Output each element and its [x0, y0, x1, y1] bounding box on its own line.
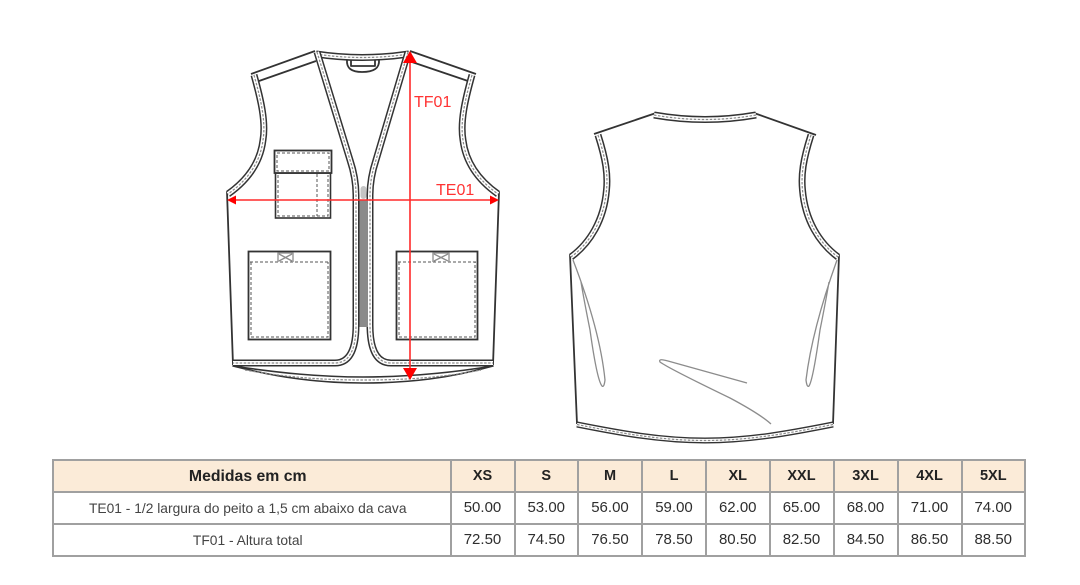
back centre crease [660, 360, 771, 424]
row TF01: 86.50 [911, 531, 948, 548]
row TF01: 72.50 [464, 531, 501, 548]
back right armhole binding [802, 135, 838, 257]
table header: 4XL [916, 468, 943, 484]
row TF01: 78.50 [655, 531, 693, 548]
row TF01 [193, 531, 1012, 548]
back vest shoulders and side seams [570, 113, 839, 424]
table header [54, 461, 1024, 548]
row TF01: 84.50 [847, 531, 884, 548]
left back fold [573, 260, 605, 386]
row TF01: 76.50 [591, 531, 629, 548]
table header: 5XL [980, 468, 1007, 484]
right armhole binding [462, 75, 498, 194]
chest pocket [274, 150, 332, 218]
right back fold [806, 260, 837, 386]
row TE01: 59.00 [655, 499, 693, 516]
measure TE01 horizontal arrow [227, 182, 499, 204]
label TF01: TF01 [414, 94, 451, 111]
back vest [570, 113, 839, 440]
left armhole binding [228, 75, 264, 194]
right shoulder seam [409, 61, 468, 81]
row TF01: 88.50 [974, 531, 1012, 548]
lower right pocket [396, 252, 478, 340]
row TE01: TE01 - 1/2 largura do peito a 1,5 cm abaixo da cava [89, 501, 407, 516]
neck hanger tab [347, 60, 379, 72]
row TF01: 80.50 [719, 531, 757, 548]
measure TF01 vertical arrow [403, 51, 451, 380]
row TE01: 50.00 [464, 499, 501, 516]
collar binding [316, 54, 409, 58]
row TE01 [89, 499, 1012, 516]
table header: Medidas em cm [189, 468, 307, 484]
vest technical drawings [226, 50, 840, 444]
row TE01: 62.00 [719, 499, 757, 516]
front vest shoulders and side seams [227, 51, 499, 365]
label TE01: TE01 [436, 182, 474, 199]
table header: S [541, 468, 551, 484]
back hem binding [577, 424, 833, 440]
row TF01: 82.50 [783, 531, 820, 548]
size table [52, 459, 1026, 557]
zipper [360, 186, 368, 327]
row TE01: 56.00 [591, 499, 629, 516]
row TE01: 71.00 [911, 499, 948, 516]
hem binding [233, 366, 493, 383]
table header: XS [473, 468, 492, 484]
left placket [233, 52, 356, 363]
right placket [370, 52, 493, 363]
back left armhole binding [571, 135, 607, 257]
row TE01: 68.00 [847, 499, 884, 516]
table header: XL [728, 468, 747, 484]
row TE01: 74.00 [974, 499, 1012, 516]
row TF01: 74.50 [527, 531, 565, 548]
front vest [227, 51, 499, 383]
table header: L [670, 468, 678, 484]
table header: M [604, 468, 616, 484]
table header: 3XL [852, 468, 879, 484]
back neck binding [654, 115, 756, 120]
row TF01: TF01 - Altura total [193, 533, 303, 548]
row TE01: 53.00 [527, 499, 565, 516]
row TE01: 65.00 [783, 499, 820, 516]
table header: XXL [787, 468, 816, 484]
lower left pocket [248, 252, 330, 340]
left shoulder seam [259, 61, 316, 81]
